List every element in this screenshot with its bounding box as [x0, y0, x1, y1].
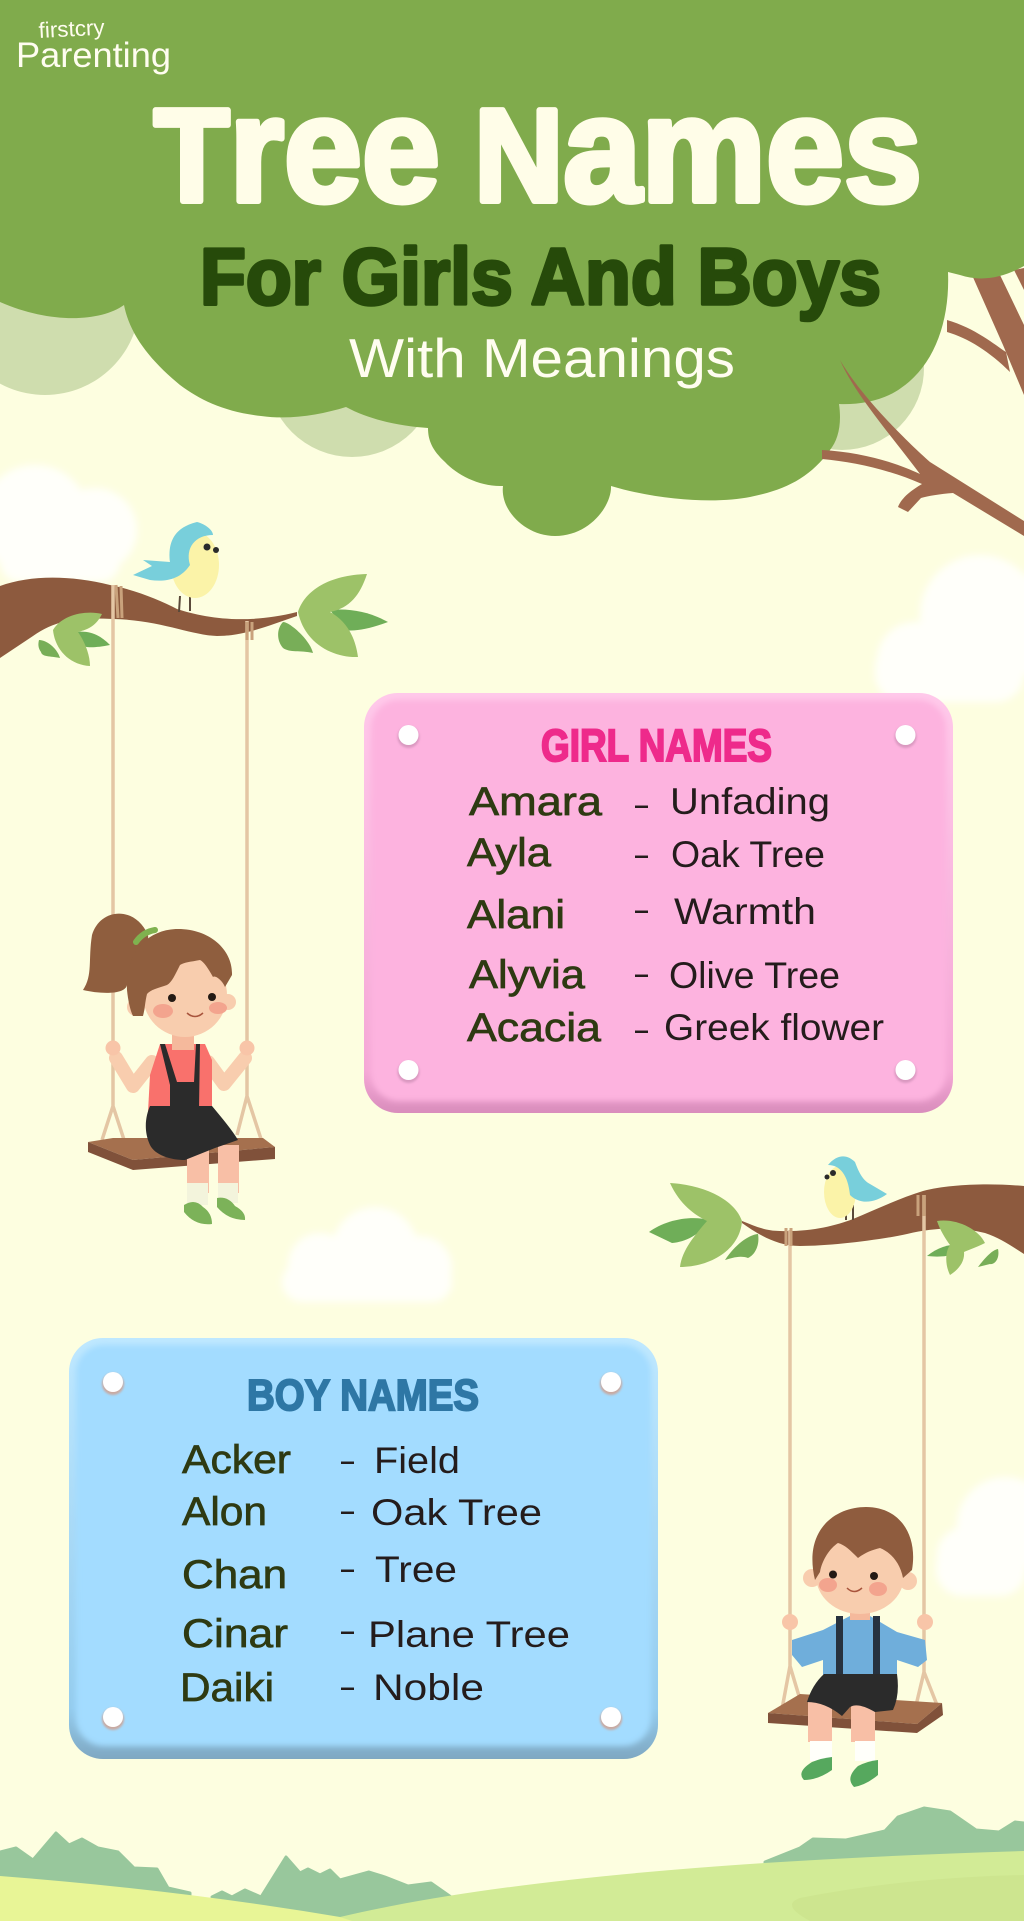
row: Alyvia: – — [635, 952, 648, 993]
arms — [116, 1058, 245, 1086]
legs — [187, 1145, 239, 1193]
row: Ayla: – — [635, 833, 648, 874]
row: Chan: Chan — [182, 1553, 287, 1597]
cloud: lower right — [936, 1477, 1024, 1596]
boy — [782, 1507, 933, 1787]
pins — [102, 1372, 622, 1730]
smile — [187, 1013, 203, 1016]
row: Alani: Alani — [467, 893, 565, 937]
row: Amara: Unfading — [670, 781, 830, 822]
row: Chan: Tree — [375, 1549, 457, 1590]
row: Alon: Oak Tree — [371, 1492, 542, 1533]
cheeks — [819, 1578, 887, 1596]
swing seat — [88, 1138, 275, 1170]
shoes — [801, 1757, 878, 1787]
left hill — [0, 1876, 370, 1921]
hands — [782, 1614, 933, 1630]
row: Alani: – — [635, 888, 648, 929]
branch with leaves — [0, 574, 388, 666]
heading: For Girls And Boys: For Girls And Boys — [200, 232, 881, 321]
ears — [803, 1569, 917, 1590]
hair tie — [136, 930, 155, 942]
branch with leaves — [649, 1183, 1024, 1275]
tree canopy — [0, 0, 1024, 536]
row: Alyvia: Olive Tree — [669, 955, 840, 996]
shorts — [807, 1674, 898, 1716]
row: Chan: – — [341, 1547, 354, 1588]
socks — [187, 1183, 238, 1205]
bushes — [0, 1808, 1024, 1917]
neck — [172, 1030, 194, 1050]
panel background: pink — [364, 693, 953, 1113]
row: Amara — [469, 780, 830, 824]
title: Tree Names: Tree Names — [154, 65, 922, 233]
heading: GIRL NAMES: GIRL NAMES — [541, 720, 772, 771]
neck — [850, 1605, 870, 1620]
bird — [133, 522, 219, 612]
row: Acker: – — [341, 1439, 354, 1480]
legs — [808, 1700, 875, 1742]
logo: Parenting: Parenting — [16, 36, 171, 75]
girl — [83, 914, 254, 1224]
lower tree branch — [822, 360, 1024, 536]
row: Alon: – — [341, 1489, 354, 1530]
hair — [812, 1507, 913, 1580]
row: Ayla: Oak Tree — [671, 834, 825, 875]
ground — [0, 1808, 1024, 1921]
logo: firstcry: firstcry — [38, 15, 105, 43]
panel: boy names — [69, 1338, 658, 1759]
face — [143, 953, 227, 1037]
hair — [127, 929, 232, 1016]
row: Acacia: – — [635, 1008, 648, 1049]
row: Ayla: Ayla — [467, 831, 552, 875]
eyes — [829, 1570, 878, 1580]
row: Cinar: Plane Tree — [368, 1614, 570, 1655]
face — [816, 1538, 904, 1614]
shirt and sleeves — [792, 1616, 927, 1680]
row: Alon — [182, 1489, 542, 1534]
skirt — [146, 1106, 238, 1160]
row: Alon: Alon — [182, 1490, 267, 1534]
cloud: upper right — [875, 555, 1024, 702]
cloud: upper left — [0, 465, 137, 582]
socks — [810, 1741, 875, 1761]
cloud: middle — [282, 1207, 452, 1302]
overall straps and bib — [160, 1044, 200, 1110]
row: Daiki — [180, 1665, 484, 1710]
boy swing scene — [649, 1156, 1024, 1787]
panel background: blue — [69, 1338, 658, 1759]
shoes — [184, 1198, 245, 1224]
right hill — [340, 1851, 1024, 1921]
row: Chan — [182, 1547, 457, 1597]
row: Acker: Field — [374, 1440, 460, 1481]
row: Daiki: – — [341, 1665, 354, 1706]
row: Amara: – — [635, 783, 648, 824]
subheading: With Meanings: With Meanings — [349, 327, 735, 389]
row: Cinar: – — [341, 1609, 354, 1650]
row: Cinar — [182, 1609, 570, 1656]
brand logo — [16, 15, 171, 75]
row: Acacia: Greek flower — [664, 1007, 884, 1048]
top — [148, 1044, 212, 1112]
eyes — [168, 993, 216, 1002]
swing ropes — [782, 1195, 937, 1718]
row: Cinar: Cinar — [182, 1612, 288, 1656]
row: Acker: Acker — [182, 1438, 291, 1482]
pins — [398, 725, 916, 1083]
row: Daiki: Daiki — [180, 1666, 274, 1710]
tree trunk and upper branch — [947, 268, 1024, 395]
row: Acacia — [467, 1006, 884, 1050]
smile — [847, 1588, 862, 1592]
swing ropes — [102, 585, 262, 1152]
row: Alyvia: Alyvia — [469, 953, 586, 997]
row: Ayla — [467, 831, 825, 875]
row: Daiki: Noble — [373, 1667, 484, 1708]
heading: BOY NAMES: BOY NAMES — [247, 1371, 479, 1420]
row: Acacia: Acacia — [467, 1006, 602, 1050]
tree canopy light lobes — [0, 205, 924, 457]
suspenders — [836, 1616, 880, 1680]
ponytail — [83, 914, 148, 993]
cheeks — [153, 1002, 227, 1018]
bird — [824, 1156, 887, 1220]
swing seat — [768, 1694, 943, 1733]
right hill shade — [792, 1875, 1024, 1921]
row: Alani: Warmth — [674, 891, 816, 932]
row: Acker — [182, 1438, 460, 1482]
girl swing scene — [0, 522, 388, 1224]
row: Alyvia — [469, 952, 840, 997]
hands — [106, 1040, 254, 1056]
row: Alani — [467, 888, 816, 937]
row: Amara: Amara — [469, 780, 603, 824]
ears — [127, 994, 236, 1016]
panel: girl names — [364, 693, 953, 1113]
